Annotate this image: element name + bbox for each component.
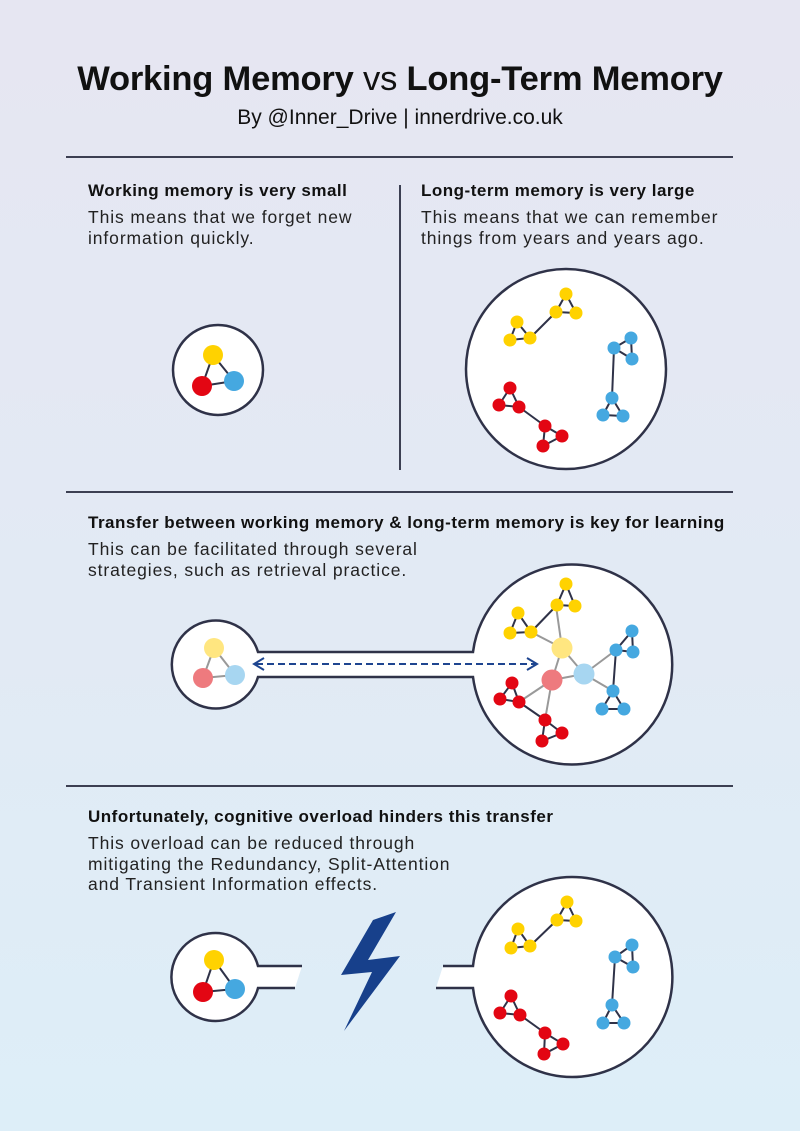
text: long-term memory large: things from years and years ago. xyxy=(421,228,705,248)
text: working memory small xyxy=(88,181,352,248)
text: overload: Unfortunately, cognitive overload hinders this transfer xyxy=(88,807,553,826)
diagram: transfer xyxy=(172,565,672,764)
text: working memory small: information quickly. xyxy=(88,228,254,248)
text: long-term memory large: This means that we can remember xyxy=(421,207,718,227)
text: working memory small: This means that we forget new xyxy=(88,207,352,227)
title: Working Memory vs Long-Term Memory xyxy=(77,60,723,98)
text: overload: mitigating the Redundancy, Split-Attention xyxy=(88,854,450,874)
diagram: overload xyxy=(171,877,672,1077)
arrow: double-headed xyxy=(254,658,537,670)
text: long-term memory large: Long-term memory is very large xyxy=(421,181,695,200)
text: long-term memory large xyxy=(421,181,718,248)
text: overload: and Transient Information effects. xyxy=(88,874,378,894)
text: transfer xyxy=(88,513,725,580)
text: overload: This overload can be reduced through xyxy=(88,833,415,853)
text: working memory small: Working memory is very small xyxy=(88,181,347,200)
icon: large long-term memory xyxy=(466,269,666,469)
text: transfer: strategies, such as retrieval practice. xyxy=(88,560,407,580)
subtitle: By @Inner_Drive | innerdrive.co.uk xyxy=(237,106,563,129)
text: transfer: Transfer between working memory & long-term memory is key for learning xyxy=(88,513,725,532)
icon: small working memory xyxy=(173,325,263,415)
icon: lightning bolt xyxy=(341,912,400,1031)
text: transfer: This can be facilitated through several xyxy=(88,539,418,559)
text: overload xyxy=(88,807,553,894)
